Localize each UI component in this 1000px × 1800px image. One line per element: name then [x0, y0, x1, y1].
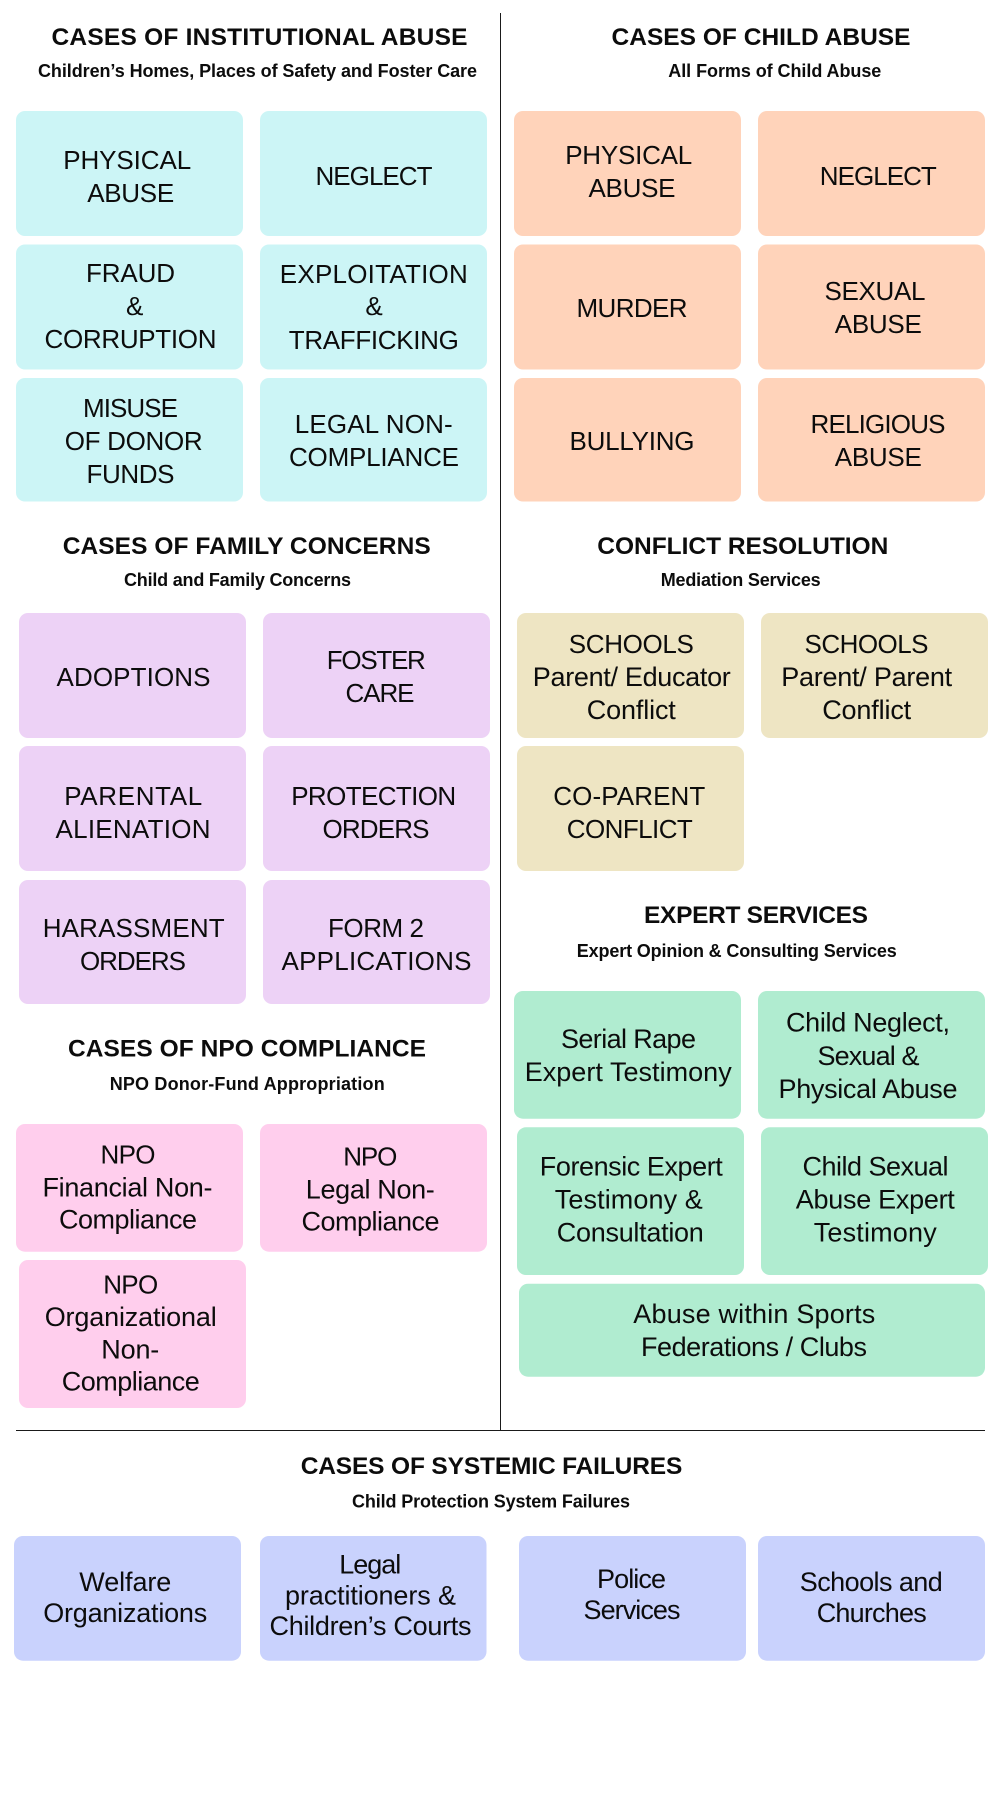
card: physical abuse: PHYSICAL — [565, 140, 692, 170]
card: child neglect sexual and physical abuse — [758, 991, 985, 1119]
heading: institutional abuse: Children’s Homes, Places of Safety and Foster Care — [38, 61, 477, 81]
card: schools parent educator conflict: SCHOOLS — [569, 629, 694, 659]
heading: npo compliance — [68, 1035, 426, 1094]
card: sexual abuse: SEXUAL — [824, 276, 926, 306]
card: legal practitioners and children's courts — [260, 1536, 486, 1661]
card: child neglect sexual and physical abuse: Child Neglect, — [786, 1008, 950, 1038]
card: legal practitioners and children's courts: Children’s Courts — [270, 1611, 472, 1641]
card: protection orders: PROTECTION — [291, 781, 456, 811]
card: schools and churches: Churches — [817, 1598, 927, 1628]
card: exploitation and trafficking: TRAFFICKING — [289, 325, 459, 355]
card: adoptions — [19, 613, 246, 738]
card: co-parent conflict — [517, 746, 744, 871]
card: fraud and corruption: FRAUD — [86, 258, 175, 288]
card: npo financial non-compliance: NPO — [100, 1140, 156, 1170]
card: neglect: NEGLECT — [820, 161, 937, 191]
card: harassment orders: HARASSMENT — [43, 913, 225, 943]
card: foster care — [263, 613, 490, 738]
card: physical abuse: ABUSE — [87, 178, 174, 208]
card: co-parent conflict: CO-PARENT — [553, 781, 705, 811]
card: abuse within sports federations — [519, 1284, 985, 1377]
card: schools parent educator conflict: Conflict — [587, 695, 676, 725]
card: sexual abuse: ABUSE — [835, 309, 922, 339]
card: serial rape expert testimony — [514, 991, 741, 1119]
card: welfare organizations: Welfare — [79, 1567, 171, 1597]
card: foster care: CARE — [346, 678, 414, 708]
heading: child abuse — [612, 24, 910, 81]
card: misuse of donor funds: OF DONOR — [65, 426, 203, 456]
card: forensic expert testimony and consultation: Testimony & — [555, 1185, 703, 1215]
card: parental alienation — [19, 746, 246, 871]
card: misuse of donor funds — [16, 378, 243, 502]
card: schools parent parent conflict: Parent/ Parent — [781, 662, 953, 692]
card: npo financial non-compliance — [16, 1124, 243, 1252]
card: neglect: NEGLECT — [316, 161, 433, 191]
card: sexual abuse — [758, 244, 985, 370]
card: neglect — [260, 111, 487, 236]
panel: conflict resolution — [517, 533, 988, 871]
card: fraud and corruption — [16, 244, 243, 370]
card: police services: Services — [584, 1595, 680, 1625]
card: exploitation and trafficking: & — [365, 291, 383, 321]
card: parental alienation: PARENTAL — [64, 781, 202, 811]
card: schools parent parent conflict: Conflict — [822, 695, 912, 725]
panel: family concerns — [19, 533, 490, 1004]
panel: npo compliance — [16, 1035, 487, 1408]
card: forensic expert testimony and consultation: Consultation — [557, 1218, 704, 1248]
card: serial rape expert testimony: Expert Testimony — [525, 1057, 732, 1087]
card: child sexual abuse expert testimony — [761, 1127, 988, 1275]
heading: systemic failures: Child Protection System Failures — [352, 1492, 630, 1512]
card: npo legal non-compliance: NPO — [343, 1142, 397, 1172]
card: npo organizational non-compliance — [19, 1260, 246, 1408]
card: child sexual abuse expert testimony: Abuse Expert — [796, 1185, 955, 1215]
card: schools parent educator conflict: Parent/ Educator — [533, 662, 731, 692]
card: religious abuse: ABUSE — [835, 442, 922, 472]
card: npo legal non-compliance: Compliance — [302, 1206, 440, 1236]
card: legal non-compliance: COMPLIANCE — [289, 442, 459, 472]
card: abuse within sports federations: Federations / Clubs — [641, 1332, 867, 1362]
card: npo legal non-compliance: Legal Non- — [306, 1174, 435, 1204]
card: religious abuse: RELIGIOUS — [810, 409, 946, 439]
card: exploitation and trafficking — [260, 244, 487, 370]
card: schools parent parent conflict: SCHOOLS — [804, 629, 928, 659]
card: foster care: FOSTER — [327, 645, 426, 675]
card: form 2 applications — [263, 880, 490, 1004]
panel: expert services — [514, 902, 988, 1377]
heading: systemic failures: CASES OF SYSTEMIC FAILURES — [301, 1453, 682, 1480]
heading: expert services — [577, 902, 897, 961]
heading: expert services: EXPERT SERVICES — [644, 902, 868, 929]
card: co-parent conflict: CONFLICT — [567, 814, 693, 844]
card: npo organizational non-compliance: Organizational — [45, 1302, 217, 1332]
card: physical abuse: PHYSICAL — [63, 145, 191, 175]
card: parental alienation: ALIENATION — [56, 814, 210, 844]
card: misuse of donor funds: FUNDS — [86, 459, 174, 489]
card: physical abuse — [16, 111, 243, 236]
heading: npo compliance: NPO Donor-Fund Appropriation — [110, 1074, 385, 1094]
card: police services: Police — [597, 1564, 666, 1594]
heading: family concerns: Child and Family Concerns — [124, 570, 351, 590]
card: bullying: BULLYING — [570, 426, 694, 456]
panel: systemic failures — [14, 1453, 985, 1661]
panel: child abuse — [514, 24, 985, 502]
card: religious abuse — [758, 378, 985, 502]
card: exploitation and trafficking: EXPLOITATION — [280, 259, 468, 289]
card: child neglect sexual and physical abuse: Physical Abuse — [778, 1074, 958, 1104]
card: schools parent educator conflict — [517, 613, 744, 738]
card: serial rape expert testimony: Serial Rape — [561, 1024, 696, 1054]
card: fraud and corruption: CORRUPTION — [44, 324, 216, 354]
card: child sexual abuse expert testimony: Testimony — [814, 1218, 937, 1248]
heading: conflict resolution — [597, 533, 888, 590]
card: harassment orders: ORDERS — [80, 946, 186, 976]
heading: expert services: Expert Opinion & Consulting Services — [577, 941, 897, 961]
card: npo organizational non-compliance: NPO — [103, 1270, 158, 1300]
card: harassment orders — [19, 880, 246, 1004]
panel: institutional abuse — [16, 24, 487, 502]
card: fraud and corruption: & — [126, 291, 143, 321]
card: legal practitioners and children's courts: Legal — [339, 1549, 401, 1579]
card: neglect — [758, 111, 985, 236]
card: npo financial non-compliance: Compliance — [59, 1204, 197, 1234]
heading: family concerns: CASES OF FAMILY CONCERNS — [63, 533, 431, 560]
card: npo organizational non-compliance: Compliance — [62, 1366, 200, 1396]
heading: institutional abuse — [38, 24, 477, 81]
card: protection orders — [263, 746, 490, 871]
card: physical abuse — [514, 111, 741, 236]
card: welfare organizations — [14, 1536, 241, 1661]
heading: conflict resolution: CONFLICT RESOLUTION — [597, 533, 888, 560]
card: abuse within sports federations: Abuse within Sports — [633, 1299, 875, 1329]
card: protection orders: ORDERS — [322, 814, 430, 844]
card: physical abuse: ABUSE — [588, 173, 676, 203]
card: adoptions: ADOPTIONS — [56, 662, 210, 692]
card: form 2 applications: FORM 2 — [328, 913, 424, 943]
card: schools and churches: Schools and — [800, 1567, 943, 1597]
card: schools parent parent conflict — [761, 613, 988, 738]
card: child sexual abuse expert testimony: Child Sexual — [802, 1152, 948, 1182]
card: forensic expert testimony and consultation: Forensic Expert — [540, 1152, 723, 1182]
card: child neglect sexual and physical abuse: Sexual & — [818, 1041, 920, 1071]
card: bullying — [514, 378, 741, 502]
card: schools and churches — [758, 1536, 985, 1661]
heading: family concerns — [63, 533, 431, 590]
heading: conflict resolution: Mediation Services — [661, 570, 821, 590]
heading: institutional abuse: CASES OF INSTITUTIONAL ABUSE — [52, 24, 468, 51]
card: npo organizational non-compliance: Non- — [101, 1334, 159, 1364]
card: misuse of donor funds: MISUSE — [83, 393, 178, 423]
card: police services — [519, 1536, 746, 1661]
card: legal non-compliance — [260, 378, 487, 502]
card: murder — [514, 244, 741, 370]
heading: npo compliance: CASES OF NPO COMPLIANCE — [68, 1035, 426, 1062]
heading: child abuse: CASES OF CHILD ABUSE — [612, 24, 910, 51]
card: legal non-compliance: LEGAL NON- — [295, 409, 453, 439]
card: welfare organizations: Organizations — [43, 1598, 207, 1628]
heading: child abuse: All Forms of Child Abuse — [668, 61, 881, 81]
card: npo financial non-compliance: Financial Non- — [42, 1172, 212, 1202]
card: forensic expert testimony and consultation — [517, 1127, 744, 1275]
card: form 2 applications: APPLICATIONS — [282, 946, 472, 976]
card: npo legal non-compliance — [260, 1124, 487, 1252]
card: murder: MURDER — [576, 293, 688, 323]
card: legal practitioners and children's courts: practitioners & — [285, 1580, 456, 1610]
heading: systemic failures — [301, 1453, 682, 1512]
